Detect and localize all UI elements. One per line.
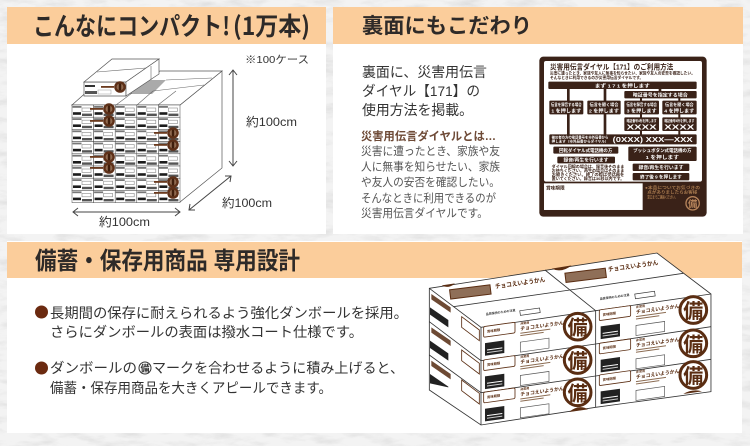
back label: how to use dial 171: 押します（市外局番からダイヤル）: [552, 139, 608, 144]
back label: how to use dial 171: 伝言を聞く場合: [590, 101, 618, 107]
heading bar: compact: こんなにコンパクト!: [33, 7, 230, 43]
bullet: stacking mark: 備: [140, 362, 150, 374]
back label: how to use dial 171: 4 を押します: [664, 108, 694, 115]
back label: how to use dial 171: 3 を押します: [627, 108, 657, 115]
heading bar: compact: (1万本): [233, 7, 310, 43]
back label: how to use dial 171: 1 を押します: [551, 108, 581, 115]
text block: about the disaster dial: や友人の安否を確認したい。: [361, 175, 500, 189]
text block: about the disaster dial: 災害に遭ったとき、家族や友: [361, 144, 500, 158]
bullet: reinforced cardboard: [35, 305, 408, 340]
back label: how to use dial 171: 備: [688, 198, 698, 209]
bullet: stacking mark: ダンボールの: [50, 360, 137, 376]
case illustration: stacked boxes: チョコえいようかん: [607, 258, 659, 274]
bullet: stacking mark: マークを合わせるように積み上げると、: [152, 360, 404, 376]
text block: about the disaster dial: 災害用伝言ダイヤルとは…: [361, 129, 496, 143]
back label: how to use dial 171: ダイヤル回線の場合は、録音後そのまま: [552, 163, 624, 169]
dimension label: width: 約100cm: [99, 214, 150, 229]
stacked cases drawing: [72, 59, 222, 203]
heading bar: storage design: [7, 242, 742, 278]
bullet: reinforced cardboard: 長期間の保存に耐えられるよう強化ダンボールを採用。: [50, 305, 408, 321]
bullet: stacking mark: [35, 360, 404, 396]
text block: about the disaster dial: [361, 129, 500, 220]
panel: back side: [333, 7, 743, 234]
back label: how to use dial 171: プッシュボタン式電話機の方: [633, 147, 692, 154]
back label: how to use dial 171: お待ちください。再生の場合はそのまま: [552, 167, 624, 173]
text block: about the disaster dial: 災害用伝言ダイヤルです。: [361, 206, 488, 220]
bullet: reinforced cardboard: さらにダンボールの表面は撥水コート仕様です。: [50, 324, 363, 340]
back label: how to use dial 171: 置いてください。録音は30秒以内です。: [552, 175, 624, 181]
text block: back side description: 使用方法を掲載。: [362, 102, 473, 118]
back label: how to use dial 171: ●本品についてお気づきの: [645, 184, 700, 190]
back label: how to use dial 171: [539, 57, 707, 217]
case illustration: stacked boxes: [429, 253, 711, 425]
back label: how to use dial 171: 暗証番号を指定する場合: [633, 92, 688, 99]
back label: how to use dial 171: XXXX: [627, 123, 657, 132]
panel: compact size: [7, 7, 326, 234]
back label: how to use dial 171: XXXX: [664, 123, 694, 132]
back label: how to use dial 171: 災害用伝言ダイヤル【171】のご利用方法: [550, 62, 674, 71]
case illustration: stacked boxes: 品質保持のための注意: [485, 307, 516, 316]
note: 100 cases: ※100ケース: [245, 54, 309, 66]
back label: how to use dial 171: まず 1 7 1 を押します: [595, 82, 650, 89]
back label: how to use dial 171: お聞きください。終了の際は受話器を: [552, 171, 624, 177]
back label: how to use dial 171: 伝言を録音する場合: [551, 101, 582, 107]
heading bar: back side: 裏面にもこだわり: [362, 15, 532, 38]
case illustration: stacked boxes: チョコえいようかん: [494, 275, 546, 291]
back label: how to use dial 171: 録音/再生を行います: [563, 157, 609, 164]
text block: back side description: ダイヤル【171】の: [362, 83, 480, 99]
back label: how to use dial 171: 点がありましたらお客様: [647, 189, 697, 195]
case illustration: stacked boxes: 品質保持のための注意: [599, 292, 630, 301]
back label: how to use dial 171: 終了後 9 を押します: [640, 173, 682, 180]
dimension label: depth: 約100cm: [222, 195, 272, 210]
text block: back side description: 裏面に、災害用伝言: [362, 64, 487, 80]
heading bar: storage design: 備蓄・保存用商品 専用設計: [35, 248, 300, 275]
back label: how to use dial 171: 2 を押します: [589, 108, 619, 115]
back label: how to use dial 171: 災害に遭ったとき、家族や友人に無事を知らせたい、家族や友人の安否を確認したい。: [550, 69, 695, 75]
back label: how to use dial 171: 伝言を聞く場合: [665, 101, 694, 107]
back label: how to use dial 171: 録音/再生を行います: [638, 164, 684, 171]
text block: back side description: [362, 64, 487, 118]
heading bar: back side: [333, 7, 743, 44]
back label: how to use dial 171: 1 を押します: [646, 154, 679, 161]
dimension label: height: 約100cm: [246, 114, 297, 129]
text block: about the disaster dial: そんなときに利用できるのが: [361, 191, 496, 205]
back label: how to use dial 171: 窓口までご連絡ください。: [647, 193, 677, 199]
back label: how to use dial 171: 暗証番号4桁を押します: [627, 118, 657, 123]
back label: how to use dial 171: 被災者の方の電話番号を市外局番から: [552, 135, 608, 140]
back label: how to use dial 171: 伝言を録音する場合: [626, 101, 657, 107]
dimension arrow: width: [73, 208, 180, 216]
back label: how to use dial 171: そんなときに利用できるのが災害用伝言ダイヤルです。: [550, 74, 643, 80]
text block: about the disaster dial: 人に無事を知らせたい、家族: [361, 160, 500, 174]
case side panel markings: [430, 294, 479, 404]
panel: storage product design: [7, 241, 742, 433]
back label: how to use dial 171: 回転ダイヤル式電話機の方: [559, 147, 613, 154]
bullet: stacking mark: 備蓄・保存用商品を大きくアピールできます。: [50, 380, 332, 396]
dimension arrow: height: [229, 70, 237, 166]
back label: how to use dial 171: (0XXX) XXX—XXX: [613, 135, 693, 144]
dimension arrow: depth: [189, 176, 231, 210]
back label: how to use dial 171: 暗証番号4桁を押します: [664, 118, 695, 123]
back label: how to use dial 171: 賞味期限: [546, 184, 565, 191]
